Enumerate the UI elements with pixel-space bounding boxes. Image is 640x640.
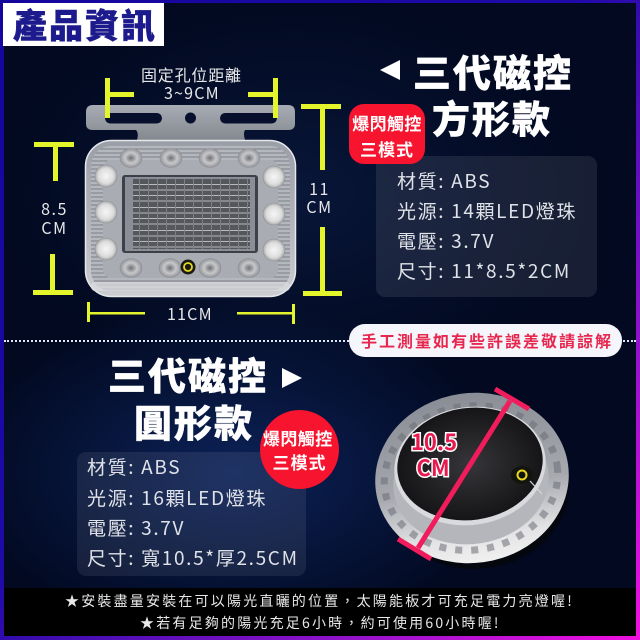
heading: round model: 三代磁控 [108,346,268,401]
footer note strip: ★若有足夠的陽光充足6小時，約可使用60小時喔! [140,613,501,633]
red circle badge: round model: 爆閃觸控 [263,425,333,450]
lamp body [85,140,296,297]
dimension label: 8.5 CM: CM [41,215,68,239]
touch button [511,466,542,494]
heading: round model [108,346,302,448]
diameter label [411,425,457,483]
diameter label: 10.5 [411,425,457,457]
red circle badge: round model: 三模式 [272,449,326,474]
notice pill: 手工測量如有些許誤差敬請諒解 [361,328,613,352]
dimension label: 8.5 CM: 8.5 [41,196,68,220]
dimension label: 11 CM [306,176,333,218]
right arrow [282,368,302,388]
spec panel: round model: 電壓: 3.7V [87,514,185,541]
dimension label: 11 CM: CM [306,194,333,218]
heading: square model: 三代磁控 [413,43,573,98]
footer note strip [4,588,636,636]
spec panel: round model: 尺寸: 寬10.5*厚2.5CM [87,544,299,571]
solar disc [387,397,553,535]
left arrow [380,60,400,80]
touch button [180,260,196,274]
title banner: 產品資訊 [13,0,157,48]
spec panel: square model: 材質: ABS [397,167,491,194]
spec panel: round model: 材質: ABS [87,453,181,480]
diameter label: CM [416,451,450,483]
red circle badge: round model [260,410,339,489]
spec panel: square model: 光源: 14顆LED燈珠 [397,197,577,224]
heading: square model: 方形款 [432,89,552,144]
heading: round model: 圓形款 [134,393,254,448]
spec panel: round model: 光源: 16顆LED燈珠 [87,484,267,511]
notice pill [349,324,622,357]
dimension label: bottom 11CM: 11CM [167,301,213,325]
mounting plate [86,105,295,140]
dotted divider [4,340,636,342]
spec panel: round model [77,452,306,576]
dimension label: 8.5 CM [41,196,68,239]
red badge: square model [349,104,425,164]
dimension label: 11 CM: 11 [309,176,330,200]
spec panel: square model: 尺寸: 11*8.5*2CM [397,257,571,284]
red badge: square model: 三模式 [360,136,414,161]
heading: square model [380,43,573,144]
dimension label: 3~9CM: 3~9CM [164,80,220,104]
dimension label: mounting hole distance: 固定孔位距離 [141,62,242,86]
red badge: square model: 爆閃觸控 [352,110,422,135]
lamp body [364,380,580,576]
spec panel: square model: 電壓: 3.7V [397,227,495,254]
footer note strip: ★安裝盡量安裝在可以陽光直曬的位置，太陽能板才可充足電力亮燈喔! [65,591,574,611]
spec panel: square model [376,156,597,297]
solar panel [122,175,258,253]
pink diameter line [398,389,529,559]
LED beads [95,148,285,278]
